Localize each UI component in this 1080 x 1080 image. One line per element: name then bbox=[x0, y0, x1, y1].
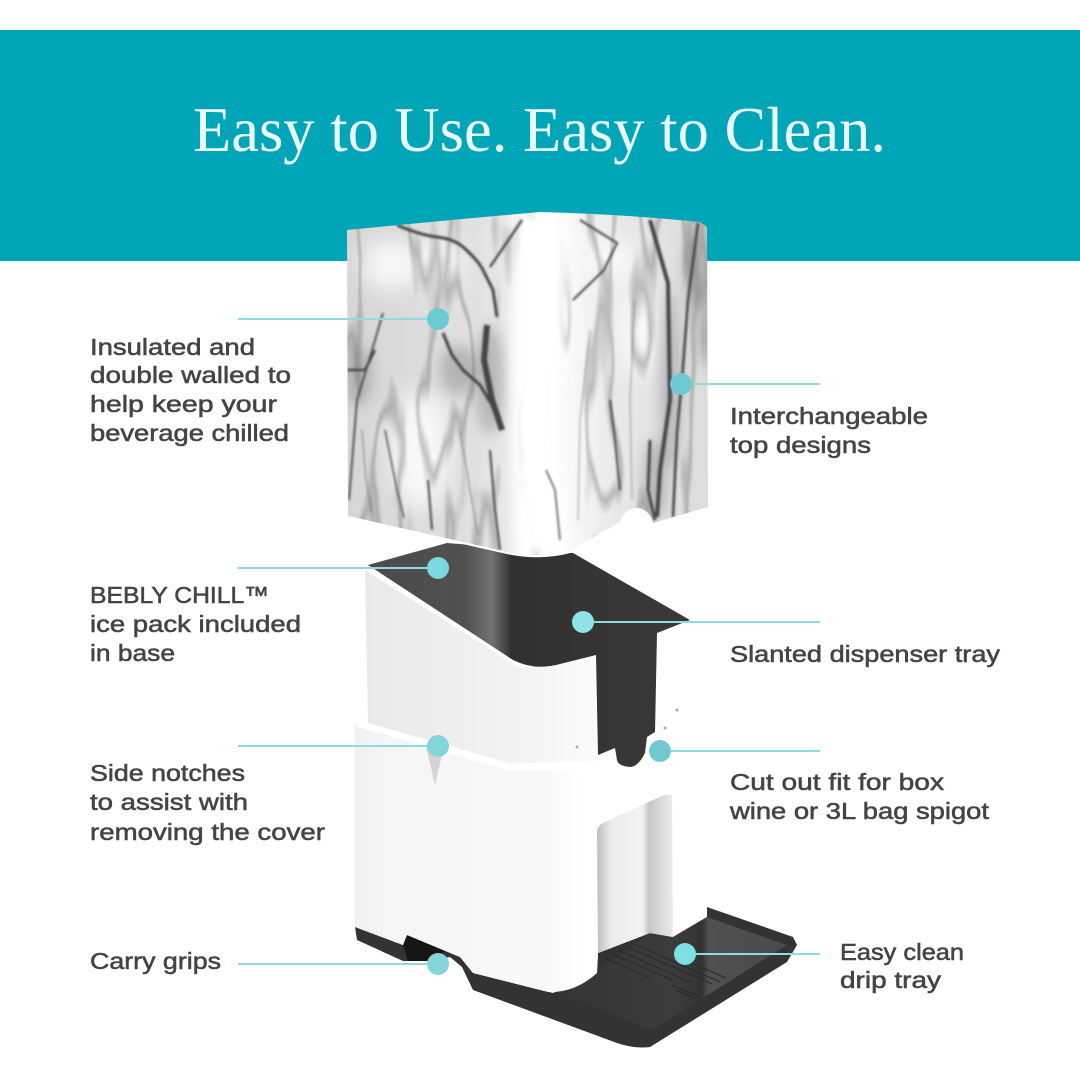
callout: side notches bbox=[90, 735, 449, 845]
callout: ice pack bbox=[90, 557, 449, 666]
callout: insulated and double walled: double walled to bbox=[90, 362, 291, 388]
product: dispenser illustration bbox=[340, 205, 797, 1048]
callout: ice pack: in base bbox=[90, 640, 175, 666]
callout: interchangeable top designs: top designs bbox=[730, 432, 871, 458]
drip tray ribs bbox=[605, 945, 726, 998]
marble top cover bbox=[340, 205, 715, 565]
callout: insulated and double walled: beverage chilled bbox=[90, 420, 289, 446]
dispenser lower base and drip tray bbox=[355, 722, 797, 1048]
callout: cut out fit: wine or 3L bag spigot bbox=[729, 798, 990, 824]
header banner bbox=[0, 30, 1080, 261]
callout: ice pack: BEBLY CHILL™ bbox=[90, 582, 269, 608]
callout: slanted dispenser tray bbox=[572, 611, 1000, 667]
callout: drip tray: Easy clean bbox=[840, 939, 964, 965]
callout: insulated and double walled bbox=[90, 308, 449, 446]
callout: cut out fit: Cut out fit for box bbox=[730, 769, 944, 795]
callout: side notches: Side notches bbox=[90, 760, 245, 786]
dispenser upper base bbox=[355, 543, 690, 771]
callout: ice pack: ice pack included bbox=[90, 611, 301, 637]
callout: interchangeable top designs: Interchangeable bbox=[730, 403, 928, 429]
callout: carry grips: Carry grips bbox=[90, 948, 221, 974]
callout: interchangeable top designs bbox=[670, 373, 928, 458]
callout: side notches: to assist with bbox=[90, 789, 248, 815]
callout: side notches: removing the cover bbox=[90, 819, 325, 845]
callout: carry grips bbox=[90, 948, 449, 975]
callout: insulated and double walled: Insulated and bbox=[90, 334, 255, 360]
callout: slanted dispenser tray: Slanted dispenser tray bbox=[730, 641, 1000, 667]
callout: drip tray bbox=[674, 939, 964, 993]
title: Easy to Use. Easy to Clean. bbox=[193, 94, 886, 165]
callout: drip tray: drip tray bbox=[840, 967, 941, 993]
callout: insulated and double walled: help keep your bbox=[90, 391, 277, 417]
callout: cut out fit bbox=[649, 740, 990, 824]
